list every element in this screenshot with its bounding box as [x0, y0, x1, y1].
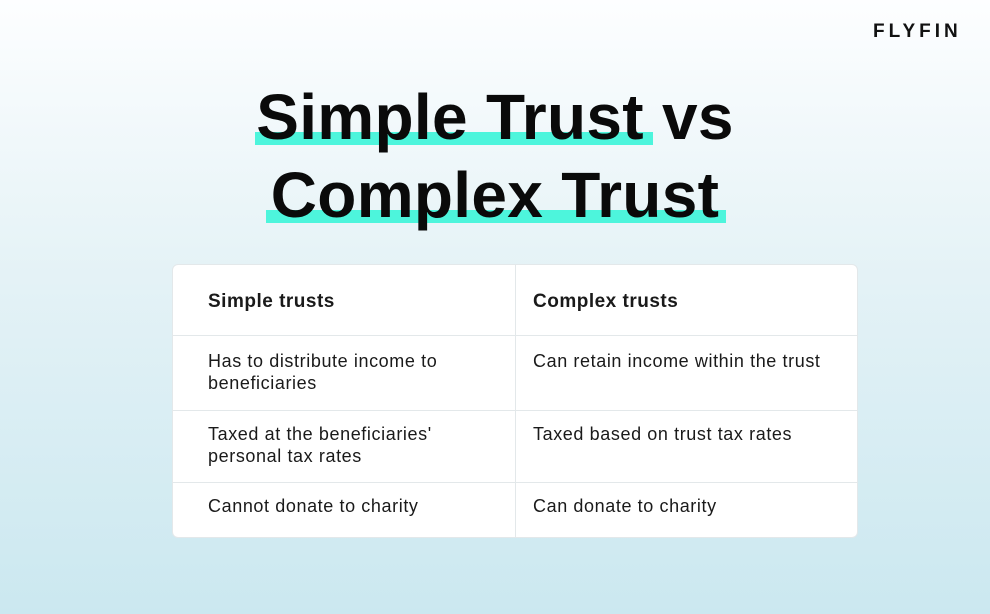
- title: Complex Trust: [271, 159, 719, 231]
- row 1: beneficiaries: [208, 373, 317, 393]
- logo: FLYFIN: [873, 21, 962, 42]
- comparison table: [172, 264, 858, 538]
- row 2: Taxed at the beneficiaries': [208, 424, 432, 444]
- row 2: [208, 424, 432, 466]
- header: simple: Simple trusts: [208, 291, 335, 312]
- title: Simple Trust vs: [256, 81, 734, 153]
- comparison table: Can donate to charity: [533, 496, 717, 516]
- row 1: [208, 351, 437, 393]
- comparison table: Taxed based on trust tax rates: [533, 424, 792, 444]
- row 2: personal tax rates: [208, 446, 362, 466]
- title: [255, 81, 734, 231]
- header: complex: Complex trusts: [533, 291, 678, 312]
- row 1: Has to distribute income to: [208, 351, 437, 371]
- row 3: Cannot donate to charity: [208, 496, 419, 516]
- comparison table: Can retain income within the trust: [533, 351, 821, 371]
